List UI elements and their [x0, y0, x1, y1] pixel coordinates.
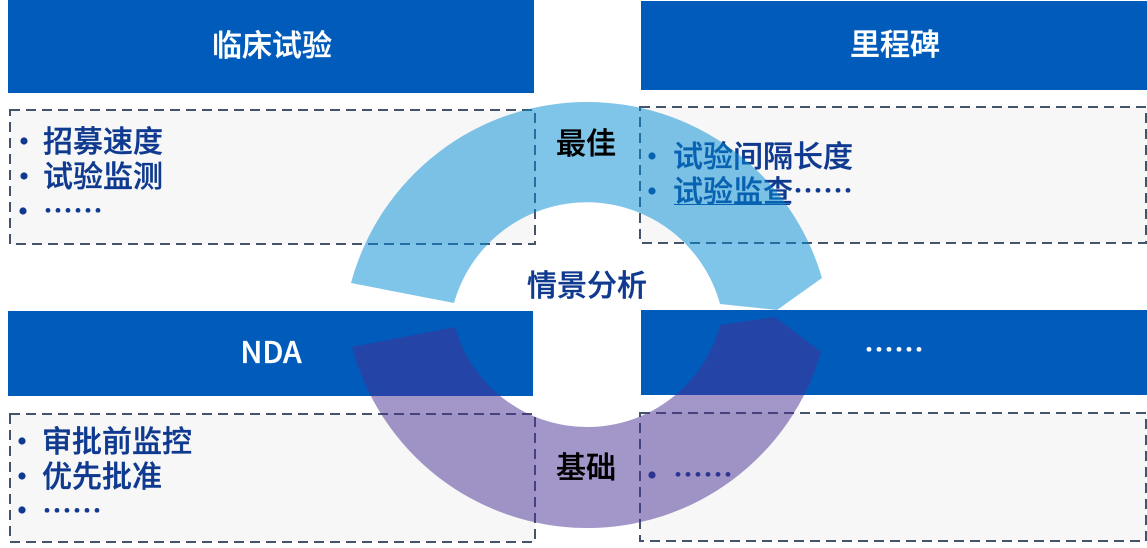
heading: other — [641, 310, 1147, 395]
list: NDA: …… — [42, 487, 102, 531]
list: NDA: 优先批准 — [42, 452, 162, 496]
heading: milestones: 里程碑 — [850, 20, 940, 64]
list: milestones: 试验间隔长度 — [673, 132, 853, 176]
panel: milestones — [640, 1, 1147, 243]
center title: scenario analysis: 情景分析 — [527, 261, 647, 305]
panel: other — [640, 310, 1147, 541]
label: best: 最佳 — [556, 119, 616, 163]
dashed box: NDA list — [10, 414, 535, 542]
arc: best case — [351, 102, 822, 310]
panel: NDA — [8, 311, 535, 542]
panel: clinical trials — [8, 0, 535, 244]
heading: clinical trials: 临床试验 — [212, 21, 332, 65]
dashed box: clinical trials list — [10, 110, 535, 244]
heading: NDA — [8, 311, 533, 396]
label: base: 基础 — [556, 443, 616, 487]
heading: clinical trials — [8, 0, 534, 93]
dashed box: milestones list — [640, 107, 1146, 243]
heading: other: …… — [864, 326, 924, 370]
heading: NDA: NDA — [240, 328, 302, 372]
list: milestones — [648, 132, 853, 211]
heading: milestones — [641, 1, 1147, 90]
list: clinical trials: …… — [43, 187, 103, 231]
list: NDA: 审批前监控 — [42, 417, 192, 461]
list: clinical trials: 试验监测 — [43, 152, 163, 196]
dashed box: other list — [640, 413, 1146, 541]
list: NDA — [18, 417, 192, 531]
arc: base case — [352, 317, 821, 528]
list: milestones: 试验监查…… — [673, 167, 853, 211]
list: clinical trials — [19, 117, 163, 231]
list: clinical trials: 招募速度 — [43, 117, 163, 161]
list: other: …… — [673, 451, 733, 495]
